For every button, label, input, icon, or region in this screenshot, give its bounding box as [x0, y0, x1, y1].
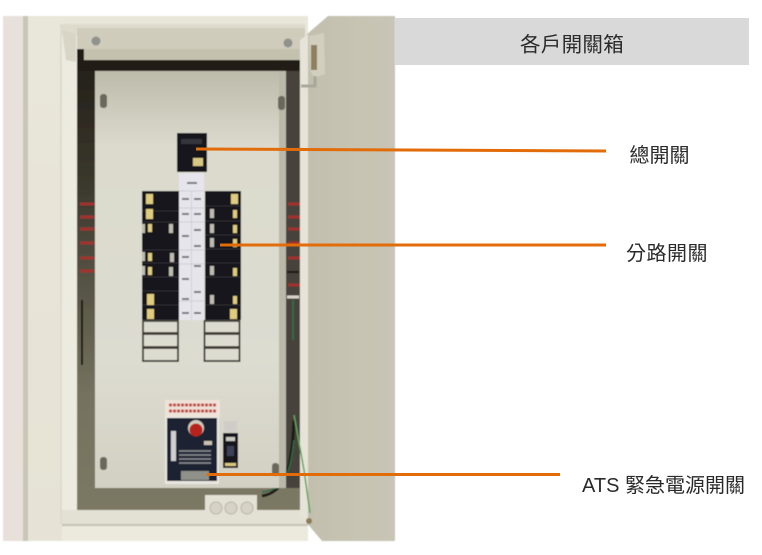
- bottom frame: [62, 510, 305, 526]
- header bar: [395, 18, 749, 65]
- callout line: main switch: [196, 149, 606, 151]
- callout line: branch switches: [220, 244, 606, 246]
- main breaker: [177, 133, 207, 172]
- cabinet frame: [28, 16, 308, 541]
- blank breaker slots: [143, 321, 240, 361]
- label: ATS emergency power switch: ATS 緊急電源開關: [582, 474, 745, 497]
- branch breakers left: [142, 191, 179, 320]
- green ground wire: [294, 415, 310, 513]
- label: main switch: 總開關: [630, 144, 690, 167]
- mounting screws: [92, 36, 100, 46]
- header bar: 各戶開關箱: [520, 34, 624, 56]
- circuit directory label: [179, 173, 204, 320]
- label: branch switches: 分路開關: [626, 242, 708, 265]
- outer wall strip: [3, 16, 24, 541]
- ATS emergency switch: [165, 416, 219, 484]
- panel fasteners: [100, 94, 285, 476]
- door hinge: [309, 33, 325, 78]
- junction box: [205, 495, 257, 518]
- photo: distribution box: [3, 16, 395, 541]
- branch breakers right: [205, 191, 241, 320]
- cabinet door: [294, 16, 395, 541]
- small breaker: [223, 421, 238, 468]
- inner panel: [95, 71, 286, 488]
- dark cabinet interior: [77, 49, 305, 510]
- ATS warning label: [165, 400, 220, 417]
- callout line: ATS switch: [207, 473, 560, 476]
